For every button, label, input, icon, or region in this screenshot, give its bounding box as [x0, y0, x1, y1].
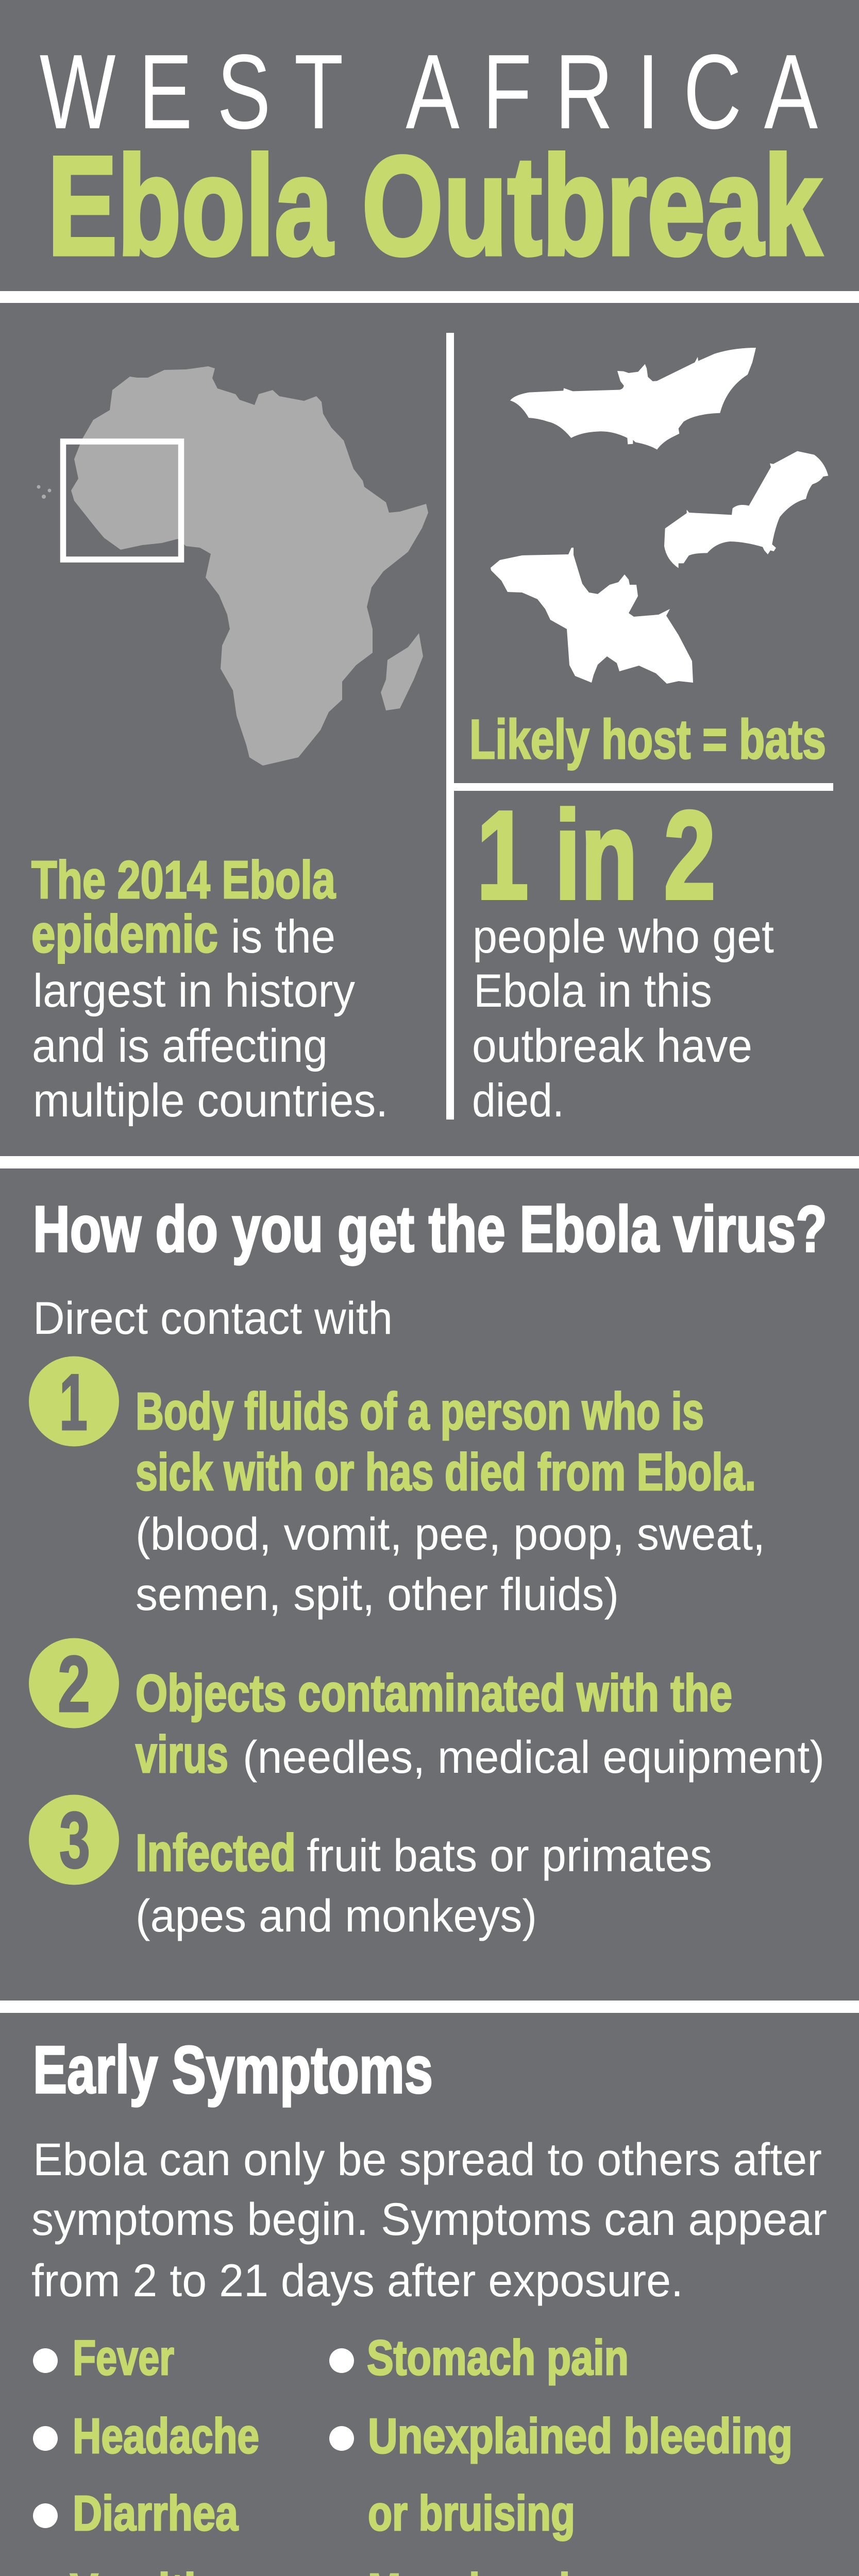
text block: epidemic description: largest in history — [33, 965, 355, 1017]
item 3 text: fruit bats or primates — [307, 1829, 712, 1881]
item 1 text — [136, 1383, 765, 1620]
list: symptoms left column: Diarrhea — [73, 2486, 239, 2541]
icon: bat bottom — [491, 548, 693, 684]
text block: epidemic description: The 2014 Ebola — [31, 850, 336, 909]
heading: Early Symptoms — [33, 2032, 433, 2107]
item 1 text: (blood, vomit, pee, poop, sweat, — [136, 1508, 765, 1560]
text block: epidemic description: is the — [231, 911, 335, 963]
list: symptoms left column: Fever — [73, 2330, 174, 2385]
item 3 text: (apes and monkeys) — [136, 1890, 537, 1941]
item 2 text: (needles, medical equipment) — [243, 1731, 824, 1783]
item 1 text: semen, spit, other fluids) — [136, 1568, 619, 1620]
list: symptoms right column: or bruising — [368, 2486, 575, 2541]
text block: stat description: died. — [472, 1075, 564, 1127]
item 3 text — [136, 1824, 712, 1941]
text block: epidemic description — [31, 850, 388, 1127]
icon: number 1 — [29, 1356, 119, 1447]
icon: number 3 — [29, 1795, 119, 1885]
item 2 text — [136, 1665, 824, 1784]
icon: number 2 — [29, 1638, 119, 1728]
text block: epidemic description: and is affecting — [32, 1020, 328, 1072]
icon: number 2: 2 — [58, 1639, 90, 1728]
text block: epidemic description: epidemic — [31, 904, 218, 963]
item 3 text: Infected — [136, 1824, 296, 1882]
panel: early symptoms — [31, 2032, 827, 2576]
icon: bat top — [510, 348, 756, 450]
text block: stat description — [472, 911, 774, 1127]
text block: stat description: Ebola in this — [474, 965, 712, 1017]
list: symptoms left column: Headache — [73, 2409, 259, 2464]
list: symptoms right column: Stomach pain — [367, 2330, 629, 2385]
list: symptoms right column — [329, 2330, 793, 2576]
text block: symptom timing: from 2 to 21 days after exposure. — [31, 2255, 683, 2306]
icon: bat middle — [664, 451, 828, 568]
stat: 1 in 2: 1 in 2 — [477, 785, 716, 925]
panel: how do you get the virus — [29, 1193, 827, 1941]
list: symptoms left column — [33, 2330, 259, 2576]
text block: stat description: people who get — [473, 911, 774, 963]
item 2 text: virus — [136, 1726, 228, 1784]
intro text: Direct contact with — [33, 1292, 393, 1344]
text block: symptom timing: symptoms begin. Symptoms can appear — [31, 2193, 827, 2245]
title line: West Africa: WEST AFRICA — [40, 32, 818, 151]
text block: epidemic description: multiple countries. — [33, 1075, 388, 1127]
icon: number 1: 1 — [59, 1358, 88, 1447]
map of Africa — [37, 366, 428, 766]
text block: symptom timing: Ebola can only be spread to others after — [33, 2133, 822, 2185]
text block: stat description: outbreak have — [472, 1020, 752, 1072]
text block: symptom timing — [31, 2133, 827, 2306]
panel: overview — [31, 333, 833, 1127]
icon: number 3: 3 — [59, 1795, 90, 1885]
title — [40, 32, 822, 285]
